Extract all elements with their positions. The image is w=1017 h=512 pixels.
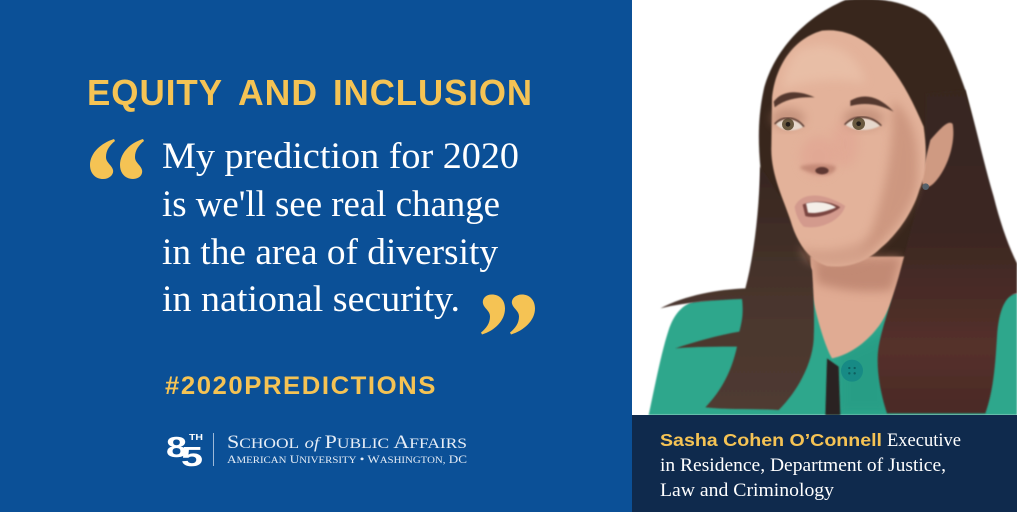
heading: EQUITY (87, 72, 223, 113)
caption text: Executive (887, 430, 961, 451)
back hair (759, 0, 982, 287)
neck (810, 257, 909, 358)
quote text: is we'll see real change (162, 184, 500, 225)
logo text: AMERICAN UNIVERSITY • W ASHINGTON, DC (227, 454, 467, 466)
button (841, 360, 863, 382)
quote text (162, 136, 519, 320)
icon: closing quotation mark (481, 294, 535, 334)
eye sockets (771, 108, 805, 128)
left front hair (660, 167, 814, 410)
ear (921, 123, 953, 187)
logo mark: 85th: 5 (181, 441, 203, 472)
caption panel (632, 415, 1017, 512)
shirt (649, 287, 1017, 415)
dark neckline placket (825, 358, 840, 415)
heading: INCLUSION (333, 72, 533, 113)
icon: opening quotation mark (90, 139, 144, 179)
heading: AND (238, 72, 318, 113)
logo text (227, 432, 467, 466)
heading (87, 72, 533, 113)
face (771, 30, 926, 267)
hashtag: #2020PREDICTIONS (165, 372, 437, 400)
quote text: My prediction for 2020 (162, 136, 519, 177)
logo mark: 85th: 8 (166, 432, 187, 464)
logo: School of Public Affairs (166, 432, 467, 472)
eyebrows (774, 92, 815, 107)
right front hair (878, 90, 1017, 413)
logo mark: 85th: TH (189, 433, 203, 442)
quote text: in national security. (162, 279, 460, 320)
face shading (862, 100, 918, 257)
logo mark: 85th (166, 432, 203, 472)
caption text (660, 430, 961, 501)
caption text: Sasha Cohen O’Connell (660, 430, 882, 450)
photo: portrait of speaker (632, 0, 1017, 415)
quote text: in the area of diversity (162, 232, 499, 273)
nose (800, 164, 836, 175)
mouth (795, 196, 845, 227)
caption text: Law and Criminology (660, 480, 835, 501)
logo text: SCHOOL of PUBLIC AFFAIRS (227, 432, 467, 453)
blue background panel (0, 0, 632, 512)
eyes (775, 117, 881, 130)
caption text: in Residence, Department of Justice, (660, 455, 946, 476)
